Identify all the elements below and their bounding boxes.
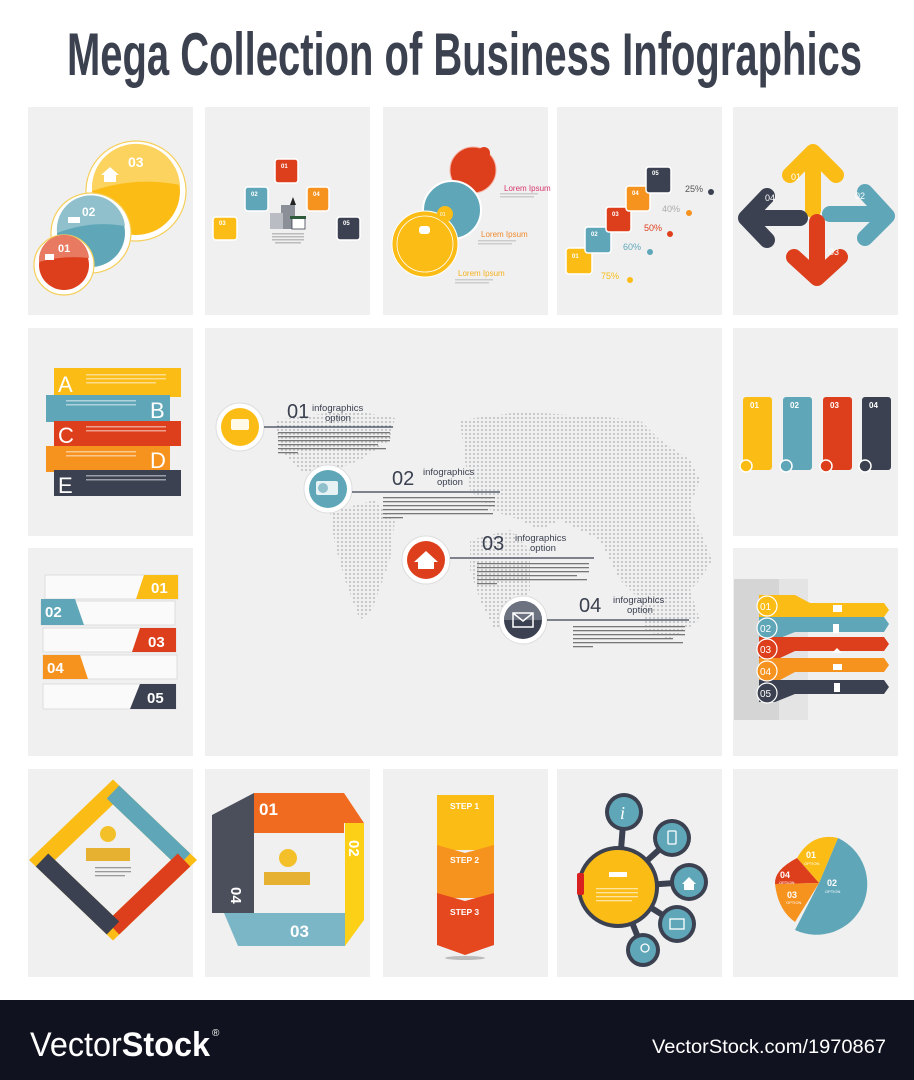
panel: octagon frame with coins: 01 bbox=[259, 800, 278, 819]
panel: four vertical cards: 03 bbox=[830, 401, 839, 410]
timeline item 01: 01 bbox=[287, 401, 309, 423]
timeline item 01: option bbox=[325, 413, 351, 424]
panel: ABCDE banners: B bbox=[150, 398, 165, 423]
panel: bubble circles with lorem ipsum: 01 bbox=[440, 212, 446, 218]
panel: octagon frame with coins: 03 bbox=[290, 922, 309, 941]
panel: staircase percentages bbox=[566, 167, 714, 283]
panel: octagon frame with coins: 04 bbox=[227, 887, 244, 904]
panel: world map timeline bbox=[216, 401, 712, 647]
panel: octagon frame with coins: 02 bbox=[345, 840, 362, 857]
panel: staircase percentages: 75% bbox=[601, 271, 619, 281]
panel: ABCDE banners: A bbox=[58, 372, 73, 397]
panel: ABCDE banners: D bbox=[150, 448, 166, 473]
timeline item 04: infographics bbox=[613, 595, 664, 606]
panel: ribbon list: 03 bbox=[760, 645, 772, 656]
panel: ribbon list: 02 bbox=[760, 624, 772, 635]
panel: pie chart bbox=[775, 837, 867, 935]
panel: numbered strips: 03 bbox=[148, 634, 165, 651]
panel: ABCDE banners bbox=[46, 368, 181, 498]
panel: step banners bbox=[437, 795, 494, 960]
footer bar: ® bbox=[212, 1028, 220, 1039]
panel: ABCDE banners: E bbox=[58, 473, 73, 498]
timeline item 04 bbox=[499, 595, 689, 647]
footer bar: VectorStock.com/1970867 bbox=[652, 1037, 886, 1058]
timeline item 02: infographics bbox=[423, 467, 474, 478]
panel: pie chart: OPTION bbox=[779, 880, 794, 885]
timeline item 04: option bbox=[627, 605, 653, 616]
timeline item 02 bbox=[304, 465, 500, 518]
panel: bubble circles with lorem ipsum: Lorem Ipsum bbox=[504, 184, 551, 193]
panel: four arrows: 03 bbox=[829, 247, 839, 257]
panel: pie chart: OPTION bbox=[825, 889, 840, 894]
panel: pie chart: OPTION bbox=[786, 900, 801, 905]
panel: numbered strips: 04 bbox=[47, 660, 64, 677]
panel: pie chart: 02 bbox=[827, 878, 837, 888]
panel: pie chart: OPTION bbox=[804, 861, 819, 866]
panel: numbered strips: 01 bbox=[151, 580, 168, 597]
panel: ribbon list: 04 bbox=[760, 667, 772, 678]
panel: numbered strips: 02 bbox=[45, 604, 62, 621]
panel: four arrows: 01 bbox=[791, 172, 801, 182]
panel: four arrows bbox=[746, 152, 887, 278]
panel: four vertical cards: 02 bbox=[790, 401, 799, 410]
timeline item 04: 04 bbox=[579, 595, 601, 617]
panel: bubble circles with lorem ipsum bbox=[392, 147, 551, 284]
panel: staircase percentages: 01 bbox=[572, 254, 579, 260]
panel: pie chart: 04 bbox=[780, 870, 790, 880]
panel: squares with building: 01 bbox=[281, 164, 288, 170]
panel: pie chart: 03 bbox=[787, 890, 797, 900]
timeline item 01 bbox=[216, 401, 393, 453]
panel: pie chart: 01 bbox=[806, 850, 816, 860]
panel: staircase percentages: 40% bbox=[662, 204, 680, 214]
timeline item 03: 03 bbox=[482, 533, 504, 555]
panel: staircase percentages: 25% bbox=[685, 184, 703, 194]
footer bar bbox=[0, 1000, 914, 1080]
panel: staircase percentages: 04 bbox=[632, 191, 639, 197]
panel: squares with building bbox=[213, 159, 360, 244]
panel: overlapping circles: 03 bbox=[128, 154, 144, 170]
panel: squares with building: 02 bbox=[251, 192, 258, 198]
panel: bubble circles with lorem ipsum: Lorem Ipsum bbox=[458, 269, 505, 278]
panel: squares with building: 05 bbox=[343, 221, 350, 227]
timeline item 01: infographics bbox=[312, 403, 363, 414]
panel: overlapping circles bbox=[34, 141, 186, 295]
panel: squares with building: 04 bbox=[313, 192, 320, 198]
timeline item 03: infographics bbox=[515, 533, 566, 544]
panel: four arrows: 02 bbox=[855, 191, 865, 201]
panel: staircase percentages: 05 bbox=[652, 171, 659, 177]
panel: overlapping circles: 01 bbox=[58, 243, 70, 255]
panel: four vertical cards: 04 bbox=[869, 401, 878, 410]
panel: staircase percentages: 50% bbox=[644, 223, 662, 233]
panel: staircase percentages: 02 bbox=[591, 232, 598, 238]
timeline item 03: option bbox=[530, 543, 556, 554]
footer bar: VectorStock bbox=[30, 1026, 210, 1064]
panel: four arrows: 04 bbox=[765, 193, 775, 203]
panel: four vertical cards: 01 bbox=[750, 401, 759, 410]
panel: bubble circles with lorem ipsum: Lorem Ipsum bbox=[481, 230, 528, 239]
panel: numbered strips: 05 bbox=[147, 690, 164, 707]
panel: hub and spokes: i bbox=[620, 803, 625, 823]
panel: squares with building: 03 bbox=[219, 221, 226, 227]
panel: step banners: STEP 3 bbox=[450, 907, 479, 917]
panel: hub and spokes bbox=[577, 793, 708, 967]
panel backgrounds bbox=[28, 107, 898, 977]
panel: staircase percentages: 03 bbox=[612, 212, 619, 218]
world map dots bbox=[275, 410, 712, 640]
panel: ribbon list: 01 bbox=[760, 602, 772, 613]
panel: ribbon list: 05 bbox=[760, 689, 772, 700]
panel: overlapping circles: 02 bbox=[82, 205, 96, 219]
panel: numbered strips bbox=[41, 575, 178, 709]
panel: ribbon list bbox=[734, 579, 889, 720]
timeline item 02: 02 bbox=[392, 468, 414, 490]
timeline item 02: option bbox=[437, 477, 463, 488]
panel: ABCDE banners: C bbox=[58, 423, 74, 448]
panel: step banners: STEP 1 bbox=[450, 801, 479, 811]
panel: step banners: STEP 2 bbox=[450, 855, 479, 865]
panel: octagon frame with coins bbox=[212, 793, 364, 946]
timeline item 03 bbox=[402, 533, 594, 584]
panel: staircase percentages: 60% bbox=[623, 242, 641, 252]
panel: four vertical cards bbox=[740, 397, 891, 472]
panel: diamond frame with coins bbox=[42, 792, 184, 928]
